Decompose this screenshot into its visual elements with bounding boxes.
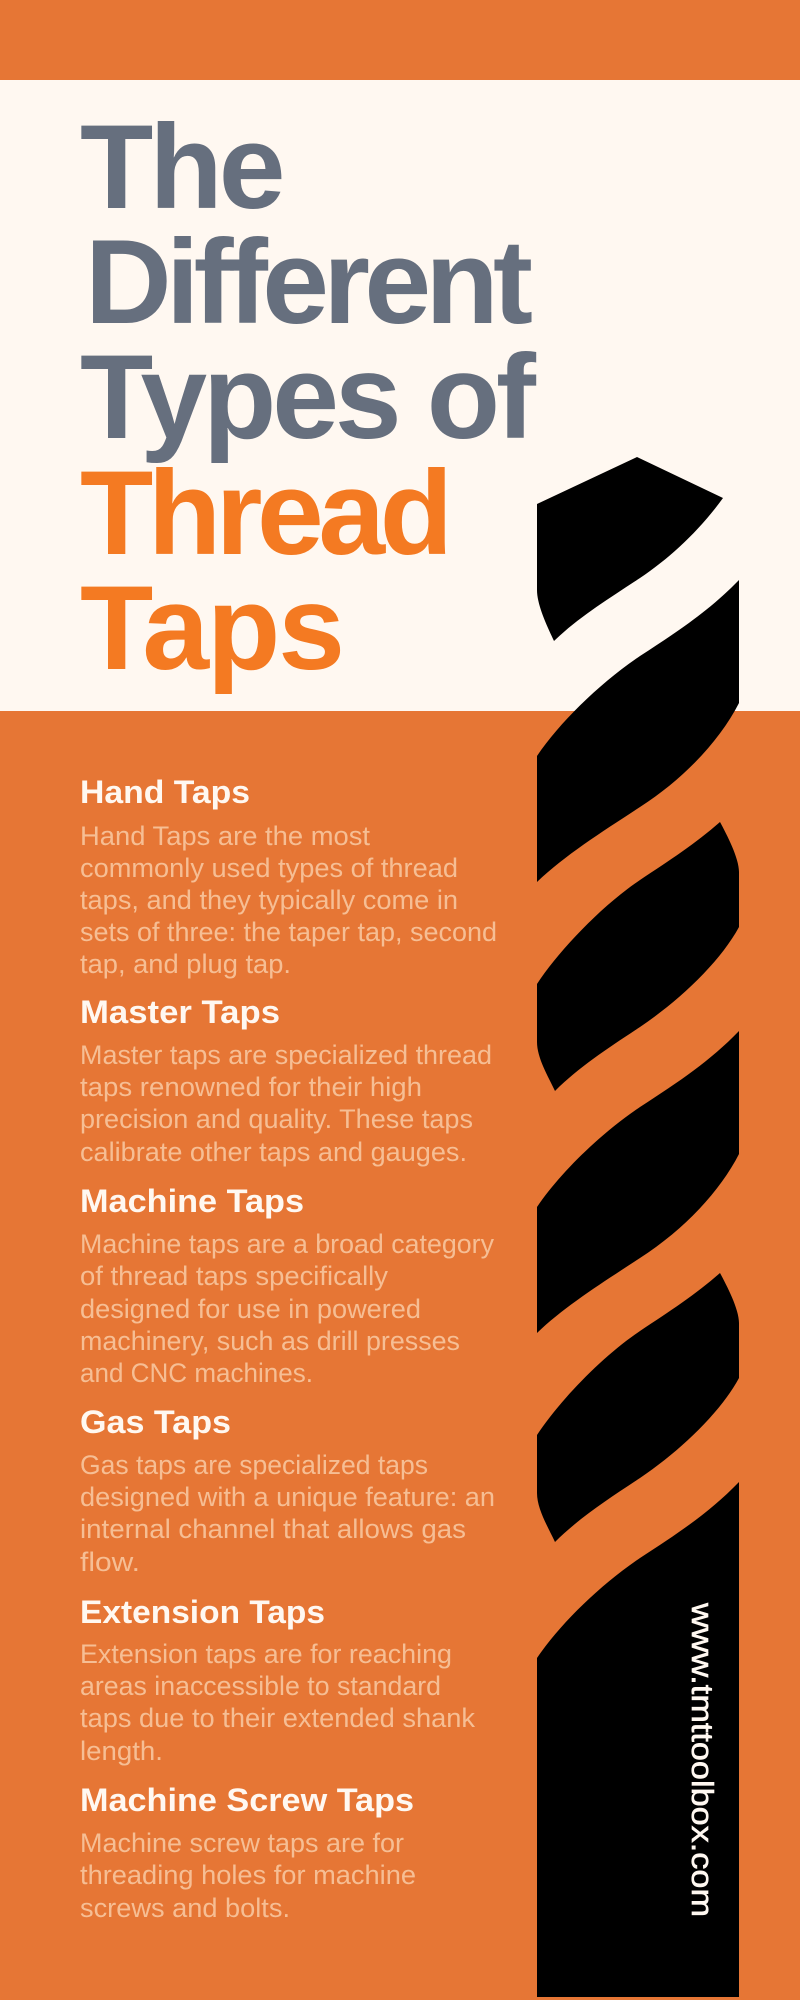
- title: Thread: [80, 446, 453, 580]
- text block: Hand Taps: commonly used types of thread: [80, 853, 458, 883]
- text block: Extension Taps: length.: [80, 1736, 163, 1766]
- panel: orange content area: [0, 711, 800, 2000]
- text block: Master Taps: [80, 994, 492, 1167]
- text block: Hand Taps: [80, 774, 497, 979]
- text block: Master Taps: precision and quality. These taps: [80, 1104, 473, 1134]
- text block: Extension Taps: taps due to their extended shank: [80, 1703, 476, 1733]
- text block: Machine Taps: designed for use in powered: [80, 1294, 421, 1324]
- text block: Extension Taps: Extension Taps: [80, 1594, 325, 1630]
- text block: Extension Taps: Extension taps are for reaching: [80, 1639, 452, 1669]
- text block: Gas Taps: designed with a unique feature: an: [80, 1482, 495, 1512]
- text block: Machine Taps: and CNC machines.: [80, 1358, 313, 1388]
- text block: Machine Screw Taps: [80, 1782, 416, 1923]
- text block: Machine Screw Taps: Machine screw taps are for: [80, 1828, 404, 1858]
- text block: Gas Taps: Gas Taps: [80, 1404, 231, 1440]
- text block: Master Taps: taps renowned for their high: [80, 1072, 422, 1102]
- title: Types of: [80, 330, 537, 464]
- text block: Gas Taps: internal channel that allows gas: [80, 1514, 466, 1544]
- text block: Hand Taps: sets of three: the taper tap, second: [80, 917, 497, 947]
- text block: Extension Taps: areas inaccessible to standard: [80, 1671, 441, 1701]
- text block: Master Taps: Master Taps: [80, 994, 280, 1030]
- title: Different: [85, 215, 533, 349]
- panel: top orange band: [0, 0, 800, 80]
- icon: drill bit: [537, 457, 739, 1997]
- text block: Machine Screw Taps: threading holes for machine: [80, 1860, 416, 1890]
- text block: Machine Screw Taps: Machine Screw Taps: [80, 1782, 414, 1818]
- text block: Machine Taps: Machine Taps: [80, 1183, 304, 1219]
- text block: Machine Taps: [80, 1183, 495, 1388]
- title: Taps: [80, 561, 345, 695]
- text block: Master Taps: Master taps are specialized thread: [80, 1040, 492, 1070]
- text block: Hand Taps: tap, and plug tap.: [80, 949, 291, 979]
- text block: Gas Taps: flow.: [80, 1547, 140, 1577]
- title: The: [80, 100, 286, 234]
- panel: cream title area: [0, 80, 800, 711]
- website url: www.tmttoolbox.com: [685, 1602, 720, 1917]
- text block: Master Taps: calibrate other taps and gauges.: [80, 1137, 467, 1167]
- title: [80, 100, 537, 695]
- text block: Hand Taps: taps, and they typically come in: [80, 885, 458, 915]
- text block: Machine Taps: of thread taps specifically: [80, 1261, 389, 1291]
- text block: Hand Taps: Hand Taps are the most: [80, 821, 371, 851]
- text block: Machine Screw Taps: screws and bolts.: [80, 1893, 290, 1923]
- text block: Extension Taps: [80, 1594, 476, 1766]
- text block: Gas Taps: [80, 1404, 495, 1577]
- text block: Machine Taps: Machine taps are a broad category: [80, 1229, 495, 1259]
- text block: Gas Taps: Gas taps are specialized taps: [80, 1450, 428, 1480]
- text block: Hand Taps: Hand Taps: [80, 774, 250, 810]
- text block: Machine Taps: machinery, such as drill presses: [80, 1326, 460, 1356]
